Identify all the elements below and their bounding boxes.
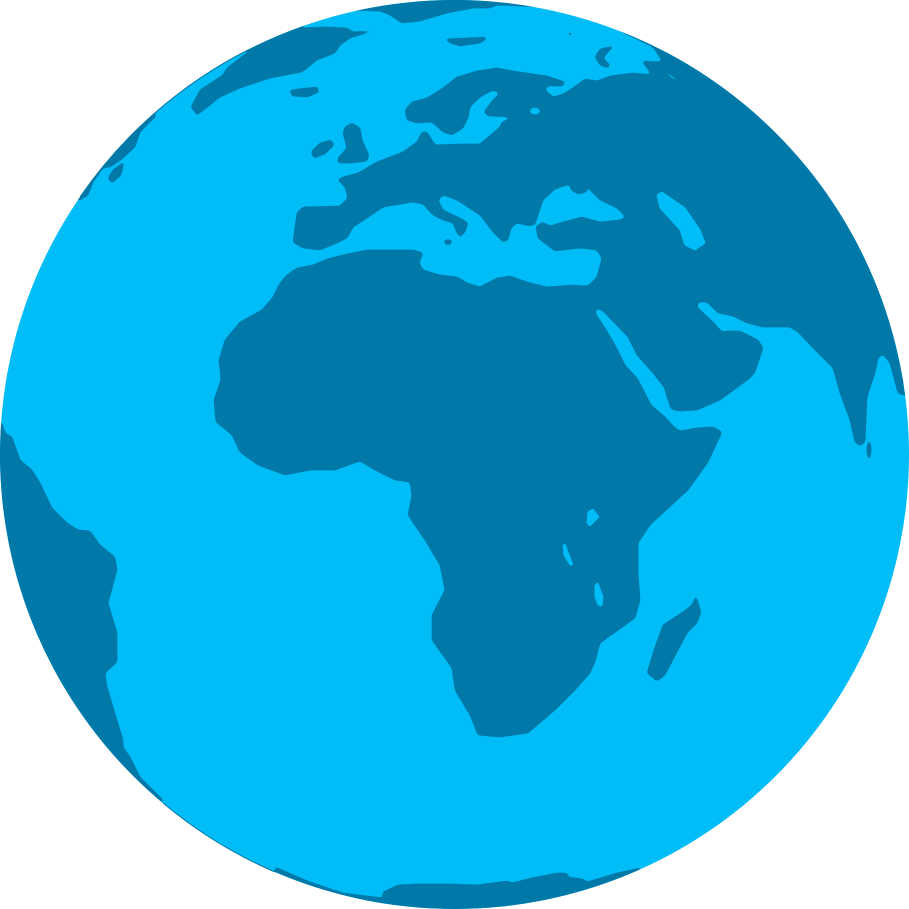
land: Greenland xyxy=(191,26,368,114)
island: Sri Lanka xyxy=(866,442,872,458)
lake: Gulf of Finland islet xyxy=(530,108,540,114)
island: Novaya Zemlya xyxy=(595,46,614,68)
island: tiny Arctic dot xyxy=(569,33,571,35)
lake: Lake Victoria xyxy=(587,509,599,526)
island: Ireland xyxy=(311,140,334,158)
globe: thin dark rim on lower left xyxy=(163,803,275,872)
land: Canadian coast xyxy=(50,100,156,200)
land: top Arctic xyxy=(340,0,540,23)
lake: Lake Tanganyika xyxy=(563,544,573,565)
land: Antarctica xyxy=(275,867,650,909)
island: Sardinia xyxy=(444,239,452,245)
land: South America xyxy=(0,420,163,820)
globe: thin dark rim on upper left xyxy=(80,50,248,197)
island: Iceland xyxy=(290,87,319,97)
lake: Arctic sliver xyxy=(667,73,676,79)
island: Great Britain xyxy=(338,123,369,163)
land: Eurasia and Africa xyxy=(214,0,909,737)
lake: Lake Malawi xyxy=(595,583,603,606)
lake: Caspian Sea xyxy=(657,192,705,250)
island: Madagascar xyxy=(647,596,701,681)
inland seas and lakes xyxy=(530,108,705,606)
island: Svalbard xyxy=(445,37,486,46)
island: small Arctic island xyxy=(108,162,124,183)
